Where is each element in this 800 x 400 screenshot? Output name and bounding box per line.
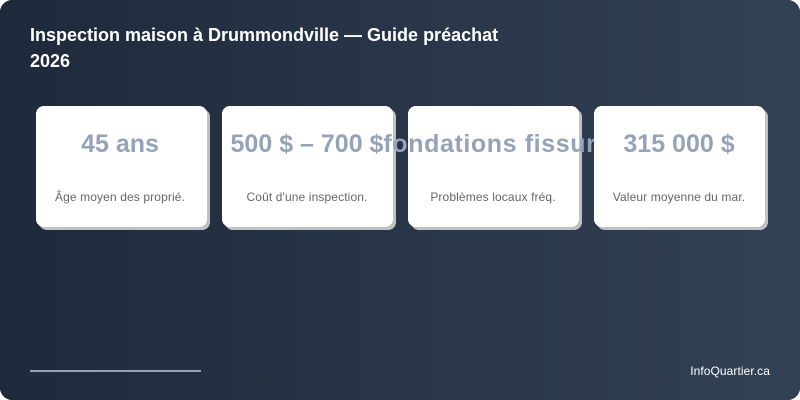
- stat: problems: fondations fissur.: [383, 130, 603, 158]
- footer line: [30, 370, 201, 372]
- stat: age: 45 ans: [81, 130, 159, 158]
- title: Inspection maison à Drummondville — Guide préachat: [30, 25, 498, 45]
- stat: cost: 500 $ – 700 $: [231, 130, 383, 158]
- label: problems: Problèmes locaux fréq.: [430, 190, 556, 204]
- label: cost: Coût d'une inspection.: [246, 190, 368, 204]
- label: market value: Valeur moyenne du mar.: [613, 190, 745, 204]
- title: 2026: [30, 51, 70, 71]
- stat: market value: 315 000 $: [623, 130, 735, 158]
- label: age: Âge moyen des proprié.: [55, 190, 185, 204]
- title: [30, 25, 498, 71]
- brand: InfoQuartier.ca: [690, 364, 770, 378]
